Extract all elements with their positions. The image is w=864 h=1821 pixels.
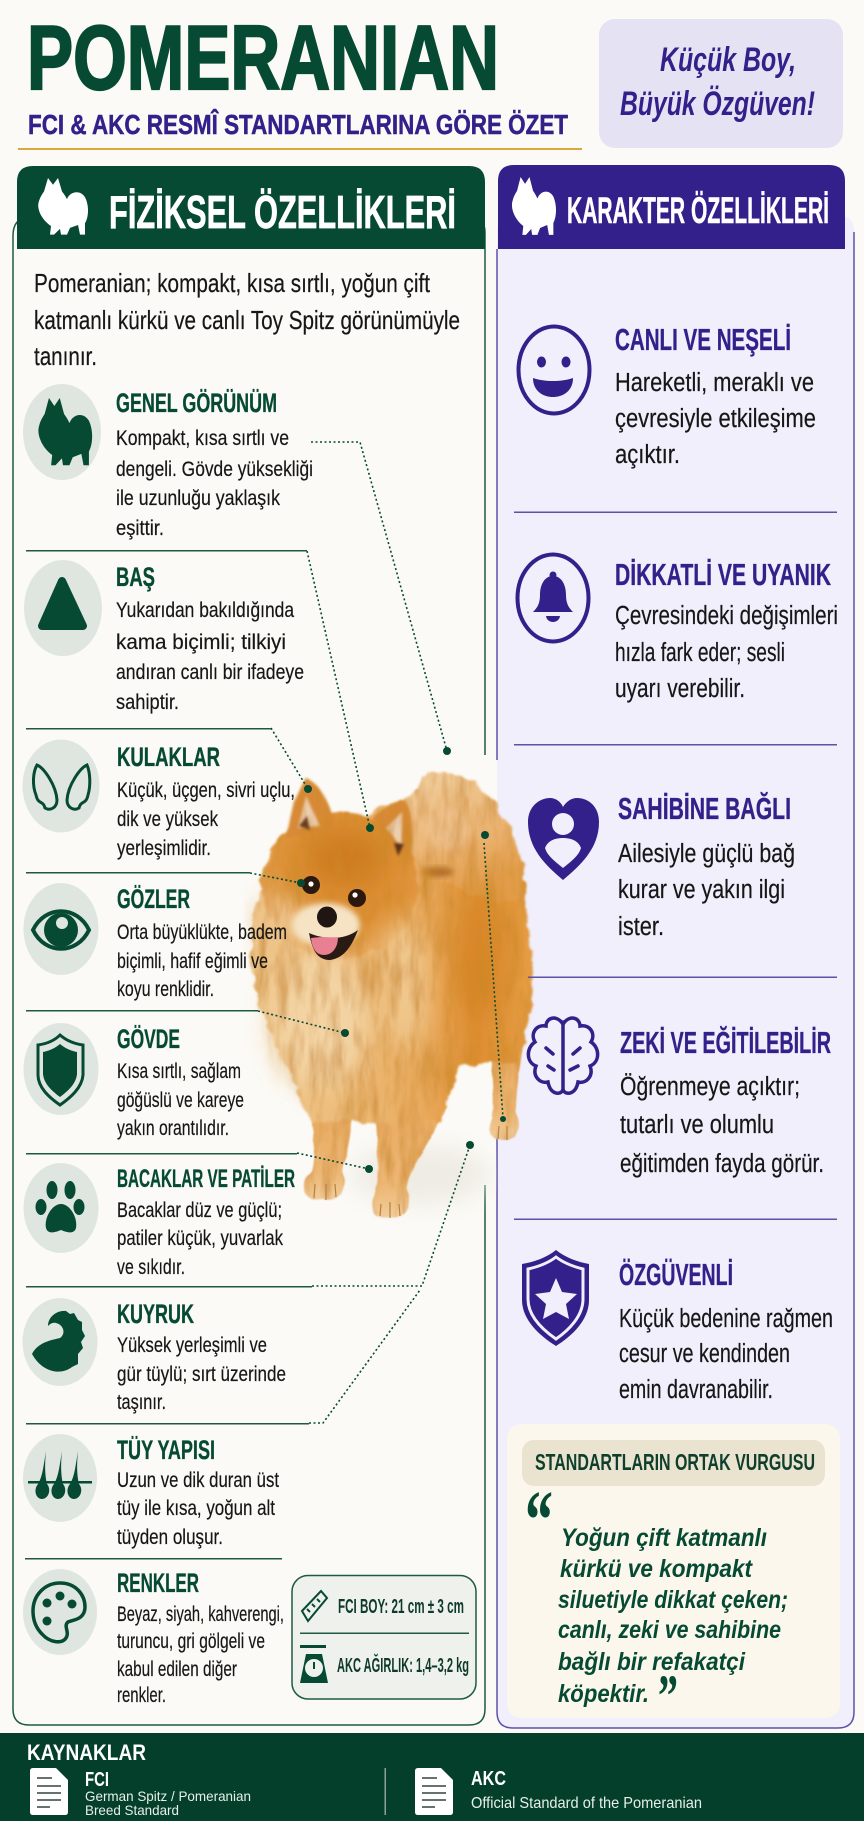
quote text — [558, 1524, 788, 1708]
body — [619, 1305, 833, 1404]
source: FCI: Breed Standard — [85, 1802, 179, 1818]
item: bacaklar ve patiler — [24, 1163, 295, 1279]
item: kuyruk — [22, 1298, 286, 1414]
body: Ailesiyle güçlü bağ — [618, 840, 795, 868]
body: Bacaklar düz ve güçlü; — [117, 1198, 282, 1222]
panel: character traits — [497, 165, 854, 1728]
body: taşınır. — [117, 1390, 166, 1414]
icon: ruler — [302, 1591, 327, 1621]
intro text: katmanlı kürkü ve canlı Toy Spitz görünümüyle — [34, 305, 460, 335]
body: dik ve yüksek — [117, 807, 218, 831]
intro text: tanınır. — [34, 341, 97, 371]
opening quote mark: “ — [525, 1474, 553, 1567]
item: genel görünüm — [23, 384, 313, 540]
panel: physical traits — [13, 166, 485, 1725]
icon: white dog — [38, 178, 88, 235]
body: Uzun ve dik duran üst — [117, 1468, 279, 1492]
trait: özgüvenli — [522, 1250, 833, 1404]
quote text: siluetiyle dikkat çeken; — [558, 1586, 788, 1614]
body: turuncu, gri gölgeli ve — [117, 1629, 265, 1653]
callout: shared emphasis quote — [507, 1424, 840, 1729]
heading: BACAKLAR VE PATİLER — [117, 1165, 295, 1193]
body: Kısa sırtlı, sağlam — [117, 1059, 241, 1083]
body: eşittir. — [116, 516, 164, 540]
body — [117, 1468, 279, 1549]
icon: heart with person — [528, 798, 599, 880]
item: baş — [24, 560, 304, 714]
title: POMERANIAN — [27, 8, 499, 109]
heading: ÖZGÜVENLİ — [619, 1257, 733, 1292]
quote text: bağlı bir refakatçi — [558, 1648, 746, 1676]
intro text — [34, 268, 460, 371]
icon: palette — [23, 1569, 97, 1655]
trait: sahibine bağlı — [528, 791, 795, 941]
source: AKC: AKC — [471, 1768, 506, 1790]
body: Küçük, üçgen, sivri uçlu, — [117, 778, 295, 802]
body: Beyaz, siyah, kahverengi, — [117, 1602, 284, 1626]
trait: dikkatli ve uyanık — [518, 554, 838, 703]
nose — [317, 906, 337, 928]
heading: GÖZLER — [117, 884, 190, 914]
body — [117, 778, 295, 860]
section dividers — [25, 550, 312, 1560]
body: andıran canlı bir ifadeye — [116, 660, 304, 684]
body: sahiptir. — [116, 690, 179, 714]
body — [116, 426, 313, 540]
body — [117, 1198, 283, 1279]
subtitle: FCI & AKC RESMÎ STANDARTLARINA GÖRE ÖZET — [28, 109, 568, 140]
body: çevresiyle etkileşime — [615, 405, 816, 433]
quote text: köpektir. — [558, 1680, 649, 1708]
icon: dog silhouette — [23, 384, 101, 480]
panel header: physical — [17, 166, 485, 249]
trait: canlı ve neşeli — [518, 322, 816, 469]
icon: document AKC — [415, 1768, 453, 1815]
heading: KUYRUK — [117, 1299, 194, 1329]
panel header: character — [498, 165, 845, 249]
icon: paw — [24, 1163, 98, 1253]
heading: KULAKLAR — [117, 742, 220, 772]
icon: brain — [528, 1018, 598, 1093]
body: açıktır. — [615, 441, 680, 469]
body — [615, 369, 816, 469]
heading: GENEL GÖRÜNÜM — [116, 388, 277, 418]
body: göğüslü ve kareye — [117, 1088, 244, 1112]
stats box — [292, 1576, 476, 1699]
body — [117, 1059, 244, 1140]
heading: RENKLER — [117, 1568, 199, 1598]
closing quote mark: ” — [658, 1663, 678, 1729]
item: gövde — [24, 1023, 244, 1140]
mouth — [309, 930, 358, 960]
footer: sources — [0, 1733, 864, 1821]
body: Yüksek yerleşimli ve — [117, 1333, 267, 1357]
muzzle — [292, 903, 360, 947]
icon: shield with star — [522, 1250, 589, 1346]
body: koyu renklidir. — [117, 977, 214, 1001]
body: biçimli, hafif eğimli ve — [117, 949, 268, 973]
body: ister. — [618, 913, 664, 941]
body: yakın orantılıdır. — [117, 1116, 229, 1140]
item: gözler — [24, 883, 287, 1001]
body — [620, 1073, 824, 1178]
tagline box — [599, 19, 843, 148]
body — [116, 598, 304, 714]
icon: eye — [24, 883, 98, 975]
trait: zeki ve eğitilebilir — [528, 1018, 831, 1178]
heading: BAŞ — [116, 562, 155, 592]
body: patiler küçük, yuvarlak — [117, 1226, 283, 1250]
icon: tail — [22, 1298, 98, 1386]
callout lines — [250, 442, 506, 1423]
footer heading: KAYNAKLAR — [27, 1740, 146, 1765]
body — [618, 840, 795, 941]
icon: document FCI — [30, 1768, 68, 1815]
icon: shield — [24, 1023, 98, 1115]
body: emin davranabilir. — [619, 1376, 773, 1404]
body: kabul edilen diğer — [117, 1657, 237, 1681]
icon: weighing scale — [300, 1645, 328, 1683]
eyes — [302, 876, 366, 907]
body: yerleşimlidir. — [117, 836, 211, 860]
heading: GÖVDE — [117, 1024, 180, 1054]
stat: weight: AKC AĞIRLIK: 1,4–3,2 kg — [337, 1653, 469, 1677]
paw toes — [314, 1126, 507, 1218]
source: AKC — [471, 1768, 702, 1812]
body: Yukarıdan bakıldığında — [116, 598, 294, 622]
body — [117, 1333, 286, 1414]
body: tutarlı ve olumlu — [620, 1111, 774, 1139]
header — [18, 8, 843, 150]
item: tüy yapısı — [23, 1434, 279, 1549]
head shading — [309, 836, 381, 880]
body: Öğrenmeye açıktır; — [620, 1073, 800, 1101]
body: ve sıkıdır. — [117, 1255, 185, 1279]
body: hızla fark eder; sesli — [615, 639, 785, 667]
ears — [286, 778, 336, 838]
icon: smiley — [518, 326, 590, 414]
icon: triangle head — [24, 560, 102, 656]
body: kurar ve yakın ilgi — [618, 876, 785, 904]
gold rule — [18, 148, 582, 150]
quote text: Yoğun çift katmanlı — [561, 1524, 767, 1552]
body — [615, 602, 838, 703]
body: tüyden oluşur. — [117, 1525, 223, 1549]
item: kulaklar — [22, 740, 295, 860]
icon: white dog small — [512, 177, 556, 235]
icon: ears — [22, 740, 100, 832]
body: gür tüylü; sırt üzerinde — [117, 1362, 286, 1386]
chest fur highlight — [270, 950, 370, 1090]
stat: height: FCI BOY: 21 cm ± 3 cm — [338, 1596, 464, 1618]
icon: hair follicles — [23, 1434, 97, 1522]
dog illustration — [250, 772, 532, 1218]
body: renkler. — [117, 1683, 166, 1707]
body: tüy ile kısa, yoğun alt — [117, 1496, 275, 1520]
source: FCI — [85, 1769, 251, 1818]
body — [117, 1602, 284, 1707]
callout tag — [522, 1440, 825, 1486]
body: ile uzunluğu yaklaşık — [116, 486, 280, 510]
heading: TÜY YAPISI — [117, 1435, 215, 1465]
panel heading: physical: FİZİKSEL ÖZELLİKLERİ — [109, 186, 456, 238]
body: cesur ve kendinden — [619, 1340, 790, 1368]
tagline box: Küçük Boy, — [660, 41, 796, 79]
quote text: kürkü ve kompakt — [560, 1555, 754, 1583]
body: uyarı verebilir. — [615, 675, 745, 703]
item: renkler — [23, 1568, 284, 1707]
body: Kompakt, kısa sırtlı ve — [116, 426, 289, 450]
source: FCI: FCI — [85, 1769, 109, 1791]
body — [117, 920, 287, 1001]
body: Orta büyüklükte, badem — [117, 920, 287, 944]
quote text: canlı, zeki ve sahibine — [558, 1616, 781, 1644]
heading: SAHİBİNE BAĞLI — [618, 791, 791, 826]
body: dengeli. Gövde yüksekliği — [116, 457, 313, 481]
source: FCI: German Spitz / Pomeranian — [85, 1788, 251, 1804]
body: Hareketli, meraklı ve — [615, 369, 814, 397]
intro text: Pomeranian; kompakt, kısa sırtlı, yoğun çift — [34, 268, 431, 298]
icon: bell — [518, 554, 588, 642]
source: AKC: Official Standard of the Pomeranian — [471, 1795, 702, 1812]
body: kama biçimli; tilkiyi — [116, 630, 286, 654]
